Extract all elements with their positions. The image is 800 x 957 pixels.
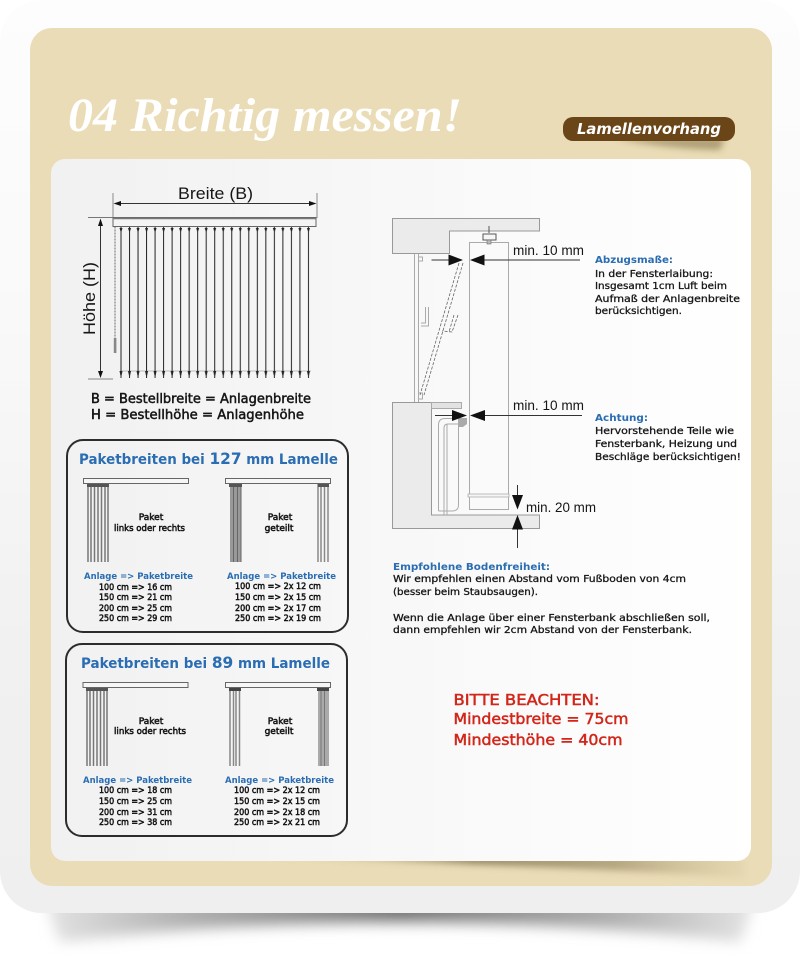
- dimension arrow: min. 20 mm: min. 20 mm: [526, 499, 596, 515]
- diagram: package split: [226, 478, 330, 562]
- badge: Lamellenvorhang: Lamellenvorhang: [577, 120, 721, 138]
- text block: Achtung: Hervorstehende Teile wie: [595, 426, 734, 437]
- page shadow: [46, 913, 754, 946]
- window frame: [414, 254, 422, 402]
- text block: Empfohlene Bodenfreiheit: [393, 562, 710, 636]
- dimension: Höhe: Höhe (H): [80, 262, 99, 335]
- open window, dashed: [420, 263, 463, 395]
- text: Paket links oder rechts: [114, 513, 185, 534]
- text block: Abzugsmaße: Abzugsmaße:: [595, 255, 673, 266]
- heading: Paketbreiten bei 127 mm Lamelle: [79, 449, 338, 468]
- text block: Abzugsmaße: Insgesamt 1cm Luft beim: [595, 281, 727, 292]
- caption: B and H: H = Bestellhöhe = Anlagenhöhe: [91, 408, 304, 423]
- caption: B and H: [91, 392, 311, 423]
- heading: Paketbreiten bei 89 mm Lamelle: [81, 653, 330, 672]
- table: package widths split: Anlage => Paketbreite: [227, 572, 336, 582]
- diagram: package left: [84, 478, 188, 562]
- callout: Bitte beachten: BITTE BEACHTEN:: [454, 691, 600, 709]
- title: 04 Richtig messen!: [68, 89, 462, 142]
- dimension: Höhe: [80, 218, 113, 379]
- text: Paket links oder rechts: Paket: [139, 513, 164, 523]
- text block: Empfohlene Bodenfreiheit: Empfohlene Bodenfreiheit:: [393, 562, 550, 573]
- dimension arrow: min. 20 mm: [512, 485, 596, 548]
- table: package widths split: 200 cm => 2x 18 cm: [234, 808, 320, 818]
- text block: Achtung: [595, 413, 741, 463]
- text: Paket links oder rechts: [114, 717, 186, 737]
- table: package widths left: [84, 572, 193, 624]
- text block: Abzugsmaße: berücksichtigen.: [595, 306, 682, 317]
- main white panel: [51, 159, 751, 861]
- dimension: Breite: [113, 184, 317, 218]
- text: Paket geteilt: Paket: [268, 513, 293, 523]
- callout: Bitte beachten: [454, 691, 628, 749]
- text: Paket geteilt: geteilt: [265, 727, 294, 737]
- callout: Bitte beachten: Mindesthöhe = 40cm: [454, 731, 622, 749]
- window sill board: [432, 402, 462, 408]
- text block: Empfohlene Bodenfreiheit: (besser beim Staubsaugen).: [393, 587, 538, 598]
- table: package widths split: [225, 776, 334, 828]
- dimension arrow: upper min. 10 mm: [432, 242, 584, 266]
- text block: Achtung: Achtung:: [595, 413, 648, 424]
- table: package widths split: 250 cm => 2x 21 cm: [234, 818, 320, 828]
- diagram: package left: [83, 682, 188, 766]
- heater: [438, 418, 458, 515]
- text: Paket links oder rechts: links oder rechts: [114, 727, 186, 737]
- dimension arrow: lower min. 10 mm: min. 10 mm: [513, 397, 584, 413]
- text: Paket geteilt: geteilt: [265, 524, 294, 534]
- table: package widths left: 250 cm => 38 cm: [99, 818, 172, 828]
- text: Paket geteilt: [265, 513, 294, 534]
- diagram: package split: [226, 682, 330, 766]
- mounting bracket: [483, 226, 496, 244]
- diagram: window cross-section: [392, 218, 596, 548]
- caption: B and H: B = Bestellbreite = Anlagenbreite: [91, 392, 311, 407]
- pull cord: [114, 227, 116, 353]
- heater fitting: [458, 418, 467, 427]
- table: package widths split: 150 cm => 2x 15 cm: [235, 593, 321, 603]
- text block: Empfohlene Bodenfreiheit: dann empfehlen wir 2cm Abstand von der Fensterbank.: [393, 625, 692, 636]
- table: package widths split: [227, 572, 336, 624]
- table: package widths left: 150 cm => 21 cm: [99, 593, 172, 603]
- text block: Abzugsmaße: Aufmaß der Anlagenbreite: [595, 294, 740, 305]
- panel: Paketbreiten 127 mm: [67, 440, 348, 632]
- slats: [117, 227, 313, 379]
- text block: Empfohlene Bodenfreiheit: Wenn die Anlage über einer Fensterbank abschließen soll,: [393, 613, 710, 624]
- text block: Achtung: Beschläge berücksichtigen!: [595, 452, 741, 463]
- table: package widths left: 100 cm => 16 cm: [99, 583, 172, 593]
- table: package widths left: [83, 776, 192, 828]
- table: package widths split: 100 cm => 2x 12 cm: [235, 582, 321, 592]
- table: package widths split: 200 cm => 2x 17 cm: [235, 604, 321, 614]
- table: package widths left: 250 cm => 29 cm: [99, 614, 172, 624]
- table: package widths split: Anlage => Paketbreite: [225, 776, 334, 786]
- text block: Achtung: Fensterbank, Heizung und: [595, 439, 737, 450]
- table: package widths split: 150 cm => 2x 15 cm: [234, 797, 320, 807]
- dimension arrow: upper min. 10 mm: min. 10 mm: [513, 242, 584, 258]
- badge: Lamellenvorhang: [563, 117, 735, 150]
- text: Paket links oder rechts: links oder rechts: [114, 524, 185, 534]
- text: Paket geteilt: [265, 717, 294, 737]
- dimension: Breite: Breite (B): [178, 184, 253, 203]
- text: Paket links oder rechts: Paket: [139, 717, 164, 727]
- table: package widths left: Anlage => Paketbreite: [84, 572, 193, 582]
- table: package widths left: 200 cm => 31 cm: [99, 808, 172, 818]
- text: Paket geteilt: Paket: [268, 717, 293, 727]
- dimension arrow: lower min. 10 mm: [435, 397, 584, 421]
- table: package widths split: 100 cm => 2x 12 cm: [234, 786, 320, 796]
- table: package widths split: 250 cm => 2x 19 cm: [235, 614, 321, 624]
- table: package widths left: 200 cm => 25 cm: [99, 604, 172, 614]
- table: package widths left: Anlage => Paketbreite: [83, 776, 192, 786]
- text block: Abzugsmaße: [595, 255, 740, 317]
- callout: Bitte beachten: Mindestbreite = 75cm: [454, 710, 628, 728]
- window handle: [421, 307, 428, 326]
- lintel: [392, 218, 540, 254]
- blind side view: [468, 242, 509, 510]
- text block: Abzugsmaße: In der Fensterlaibung:: [595, 269, 713, 280]
- headrail: [113, 218, 316, 226]
- panel: Paketbreiten 89 mm: [66, 644, 347, 836]
- table: package widths left: 150 cm => 25 cm: [99, 797, 172, 807]
- table: package widths left: 100 cm => 18 cm: [99, 786, 172, 796]
- wall and window sill: [392, 402, 540, 528]
- text block: Empfohlene Bodenfreiheit: Wir empfehlen einen Abstand vom Fußboden von 4cm: [393, 574, 686, 585]
- diagram: blind with width and height dimensions: [80, 184, 317, 379]
